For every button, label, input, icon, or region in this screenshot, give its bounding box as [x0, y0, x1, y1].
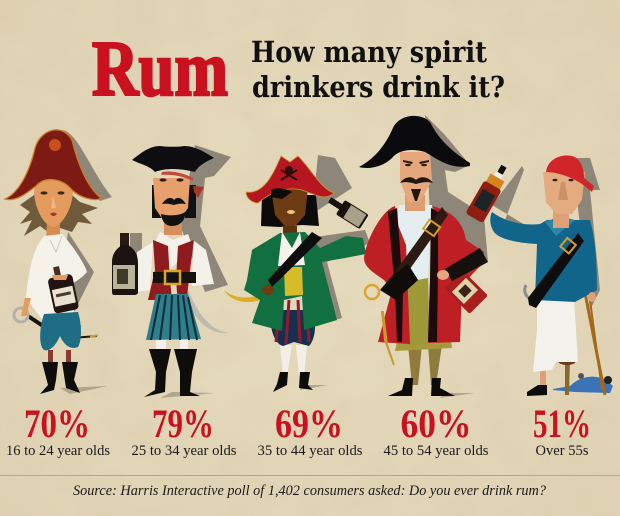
heading: question: [251, 35, 505, 104]
sash: [268, 232, 322, 287]
hair: [20, 195, 98, 236]
eye patch: [271, 188, 292, 199]
heading: question: How many spirit: [251, 35, 488, 69]
boots: [144, 349, 200, 397]
coat trim: [388, 208, 438, 342]
buckle: [423, 220, 440, 236]
stat: 79% 25 to 34 year olds: 79%: [152, 401, 214, 446]
shirt: [26, 234, 87, 322]
hat: [132, 146, 214, 172]
shoes: [273, 372, 313, 392]
hand: [262, 285, 274, 295]
neck: [553, 208, 569, 228]
coat: [244, 232, 366, 331]
moustache: [400, 177, 433, 184]
stat: 60% 45 to 54 year olds: [384, 401, 489, 459]
stat: 70% 16 to 24 year olds: 16 to 24 year olds: [6, 443, 110, 459]
stat: 69% 35 to 44 year olds: [258, 401, 363, 459]
hat: [359, 116, 470, 168]
hair: [261, 195, 319, 227]
pirate 5: older peg-legged pirate, over 55s: [465, 156, 613, 396]
beard: [161, 212, 185, 226]
scabbard and sword: [14, 308, 98, 338]
pirate 2: bearded man with black hat, 25 to 34: [112, 145, 231, 398]
stockings: [48, 350, 71, 362]
stat: 60% 45 to 54 year olds: 60%: [400, 401, 472, 446]
stat: 69% 35 to 44 year olds: 69%: [275, 401, 343, 446]
bandana: [546, 156, 594, 192]
trousers: [40, 312, 81, 350]
face: [153, 178, 190, 226]
trousers: [533, 298, 578, 372]
sword blade: [182, 285, 229, 333]
sheath: [382, 312, 394, 365]
legs: [408, 345, 442, 385]
boots: [40, 362, 80, 394]
waistcoat: [284, 267, 303, 296]
legs: [156, 340, 188, 350]
pirate 1: woman in dark red hat, 16 to 24: [5, 130, 112, 394]
peg leg: [565, 360, 570, 395]
pirate 3: eye-patched pirate in green coat, 35 to 44: [224, 155, 370, 392]
face: [543, 172, 585, 214]
moustache: [162, 198, 186, 205]
hat: [246, 156, 334, 203]
sword hilt: [365, 285, 379, 299]
stat: 51% over 55s: 51%: [533, 401, 591, 446]
stat: 79% 25 to 34 year olds: [132, 401, 237, 459]
pirate 4: captain with red coat, 45 to 54: [359, 115, 488, 398]
vest: [148, 240, 172, 300]
bottle: [444, 270, 488, 314]
face: [271, 188, 308, 232]
shoulder strap: [392, 207, 448, 283]
heading: question: drinkers drink it?: [252, 70, 505, 104]
shirt: [490, 212, 597, 302]
breeches: [395, 320, 452, 351]
title: Rum: Rum: [92, 25, 228, 112]
bandana: [161, 171, 193, 181]
neck: [164, 220, 182, 235]
stat: 60% 45 to 54 year olds: 45 to 54 year olds: [384, 443, 489, 459]
hand: [588, 292, 596, 302]
hook: [525, 285, 534, 300]
bottle: [45, 264, 79, 314]
source note: Source: Harris Interactive poll of 1,402 consumers asked: Do you ever drink rum?: [73, 483, 547, 499]
stat: 70% 16 to 24 year olds: 70%: [24, 401, 90, 446]
bottle: [112, 233, 138, 295]
coat: [364, 206, 410, 344]
crutch: [577, 252, 605, 395]
belt: [153, 272, 196, 283]
waistcoat: [402, 276, 430, 345]
ruffle shirt: [278, 232, 305, 266]
skull and crossbones: [281, 170, 297, 180]
arm and hand: [21, 298, 31, 316]
neck: [405, 195, 425, 211]
hat: [5, 130, 101, 200]
foot and shoe: [540, 368, 546, 388]
sleeves and shirt: [136, 242, 153, 292]
stat: 69% 35 to 44 year olds: 35 to 44 year olds: [258, 443, 363, 459]
legs and stockings: [280, 345, 307, 376]
bottle: [465, 161, 513, 223]
hair: [152, 185, 196, 218]
bottle: [325, 193, 369, 229]
trousers: [271, 310, 315, 346]
shoes: [388, 378, 455, 396]
sword: [224, 290, 268, 302]
goatee: [411, 189, 421, 201]
face: [400, 152, 432, 202]
black pouch: [380, 264, 418, 300]
neck: [283, 226, 297, 242]
stat: 70% 16 to 24 year olds: [6, 401, 110, 459]
neck: [46, 222, 60, 250]
lips: [287, 210, 295, 214]
stat: 51% over 55s: Over 55s: [536, 443, 589, 459]
stat: 51% over 55s: [533, 401, 591, 459]
face: [34, 180, 73, 227]
stat: 79% 25 to 34 year olds: 25 to 34 year olds: [132, 443, 237, 459]
parrot: [553, 373, 613, 393]
belt strap: [528, 233, 584, 308]
cuff and hand: [445, 248, 488, 281]
kilt: [146, 294, 201, 340]
shirt: [397, 205, 432, 282]
